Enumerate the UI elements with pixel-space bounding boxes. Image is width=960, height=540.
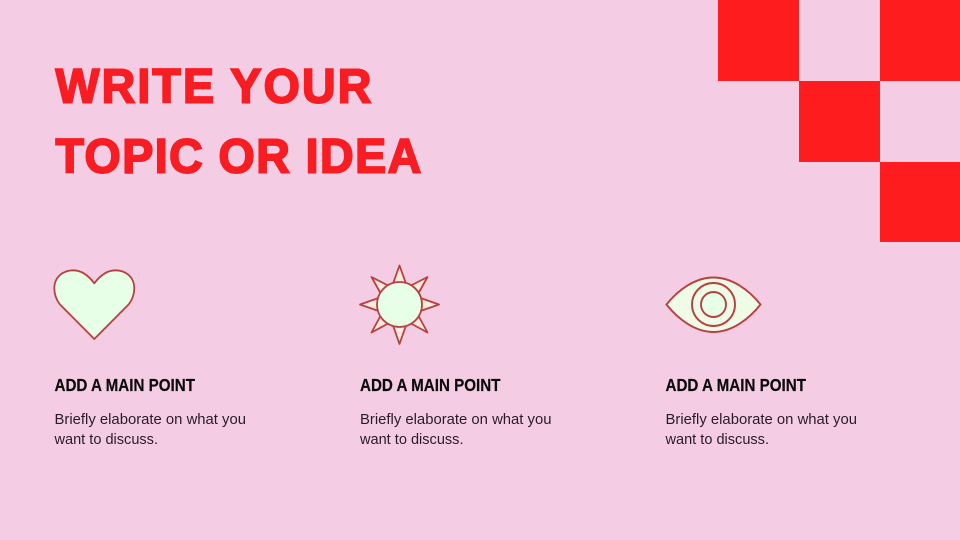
heading: ADD A MAIN POINT <box>360 375 501 395</box>
column 1: heart point <box>54 270 246 448</box>
heading: ADD A MAIN POINT <box>54 375 195 395</box>
icon: eye <box>666 278 760 332</box>
description: Briefly elaborate on what you <box>360 411 552 428</box>
decorative red checker squares <box>718 0 960 242</box>
column 3: eye point <box>665 278 857 448</box>
title: WRITE YOUR <box>56 60 371 114</box>
title <box>56 60 421 184</box>
column 2: sun point <box>359 266 552 448</box>
description: want to discuss. <box>54 431 158 448</box>
description: Briefly elaborate on what you <box>54 411 246 428</box>
description <box>359 411 552 448</box>
description <box>665 411 857 448</box>
description: want to discuss. <box>665 431 769 448</box>
description <box>54 411 246 448</box>
icon: sun <box>360 266 439 344</box>
icon: heart <box>54 270 134 339</box>
title: TOPIC OR IDEA <box>56 130 421 184</box>
description: want to discuss. <box>359 431 464 448</box>
description: Briefly elaborate on what you <box>666 411 857 428</box>
heading: ADD A MAIN POINT <box>666 375 806 395</box>
